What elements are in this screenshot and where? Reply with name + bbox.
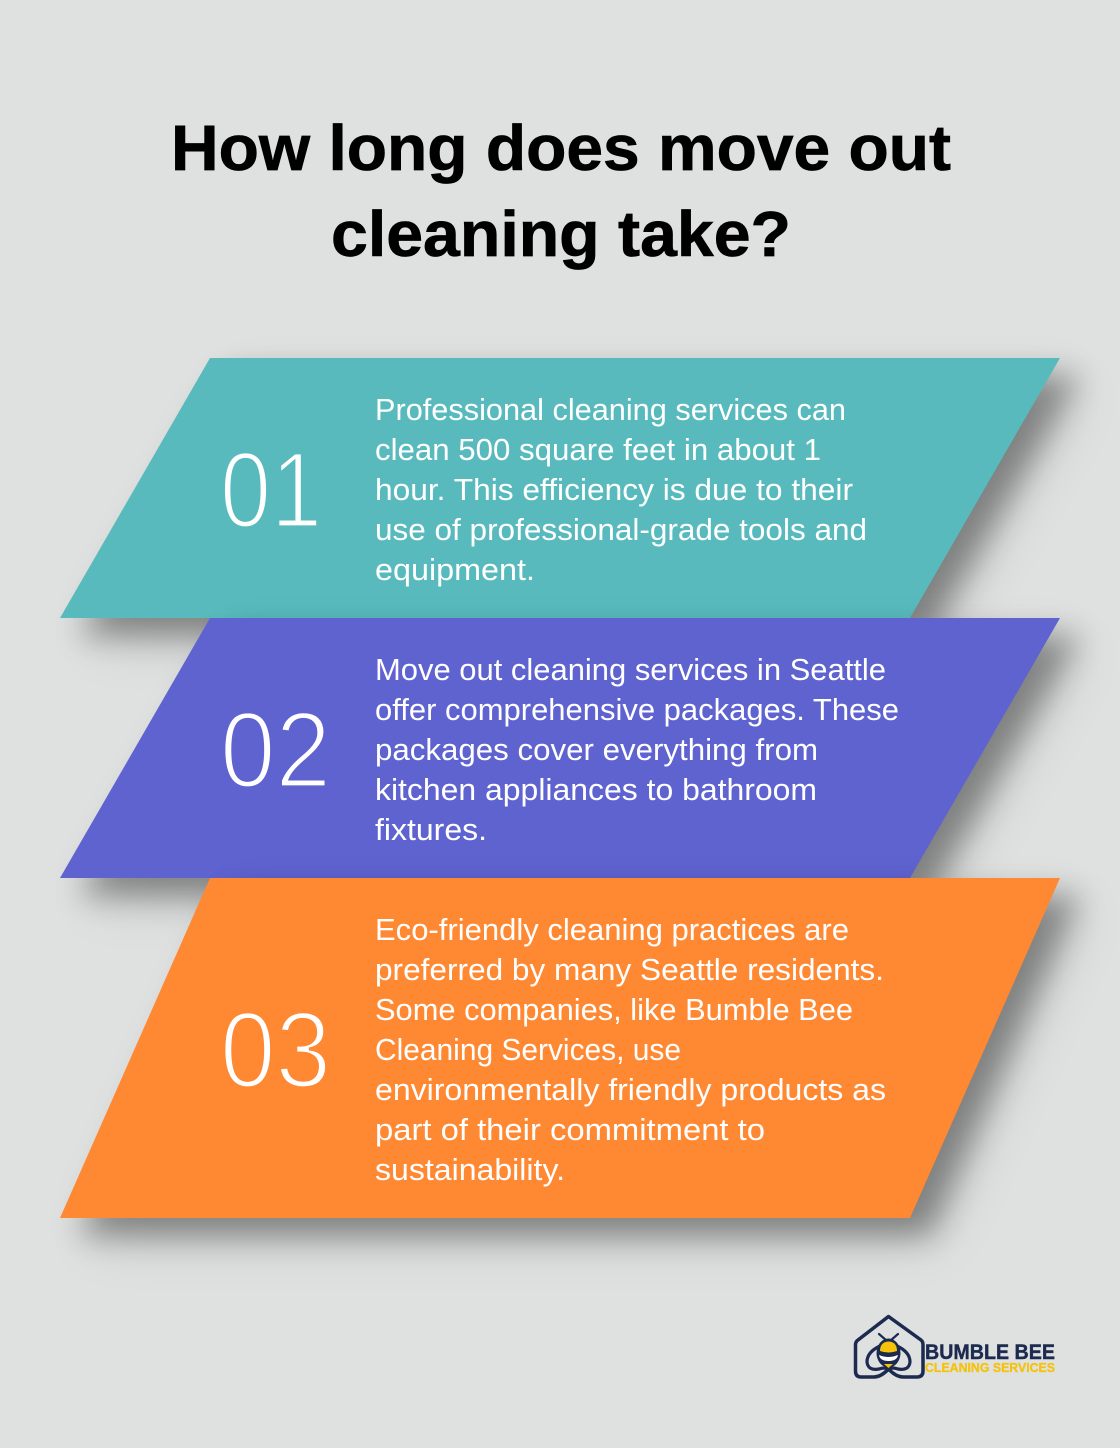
number 03: 03 xyxy=(220,989,331,1110)
panel: step 03 xyxy=(60,878,1085,1243)
orange parallelogram xyxy=(60,878,1060,1218)
wordmark: BUMBLE BEE xyxy=(925,1340,1055,1364)
text: step 02 description: kitchen appliances to bathroom xyxy=(375,772,817,807)
text: step 01 description: clean 500 square feet in about 1 xyxy=(375,432,821,467)
panel: step 02 xyxy=(60,618,1085,903)
text: step 01 description: hour. This efficiency is due to their xyxy=(375,472,853,507)
teal parallelogram xyxy=(60,358,1060,618)
text: step 01 description: Professional cleaning services can xyxy=(375,392,846,427)
text: step 03 description: Eco-friendly cleaning practices are xyxy=(375,912,849,947)
text: step 02 description: Move out cleaning services in Seattle xyxy=(375,652,886,687)
text: step 03 description: part of their commitment to xyxy=(375,1112,765,1147)
icon: house outline xyxy=(856,1316,923,1377)
text: step 03 description: Cleaning Services, use xyxy=(375,1032,681,1067)
text: step 01 description xyxy=(375,392,867,587)
text: step 02 description xyxy=(375,652,899,847)
text: step 03 description: Some companies, like Bumble Bee xyxy=(375,992,853,1027)
text: step 01 description: use of professional-grade tools and xyxy=(375,512,867,547)
text: step 03 description: preferred by many Seattle residents. xyxy=(375,952,884,987)
title xyxy=(171,112,951,270)
number 02: 02 xyxy=(220,689,331,810)
title: cleaning take? xyxy=(331,198,791,270)
number 01: 01 xyxy=(220,429,322,550)
text: step 02 description: offer comprehensive packages. These xyxy=(375,692,899,727)
panel: step 01 xyxy=(60,358,1085,643)
logo: Bumble Bee Cleaning Services xyxy=(856,1316,1055,1377)
text: step 03 description: sustainability. xyxy=(375,1152,565,1187)
title: How long does move out xyxy=(171,112,951,184)
text: step 01 description: equipment. xyxy=(375,552,535,587)
purple parallelogram xyxy=(60,618,1060,878)
icon: bee xyxy=(867,1334,910,1369)
tagline: CLEANING SERVICES xyxy=(925,1361,1055,1375)
text: step 03 description xyxy=(375,912,886,1187)
text: step 03 description: environmentally friendly products as xyxy=(375,1072,886,1107)
text: step 02 description: fixtures. xyxy=(375,812,487,847)
text: step 02 description: packages cover everything from xyxy=(375,732,818,767)
